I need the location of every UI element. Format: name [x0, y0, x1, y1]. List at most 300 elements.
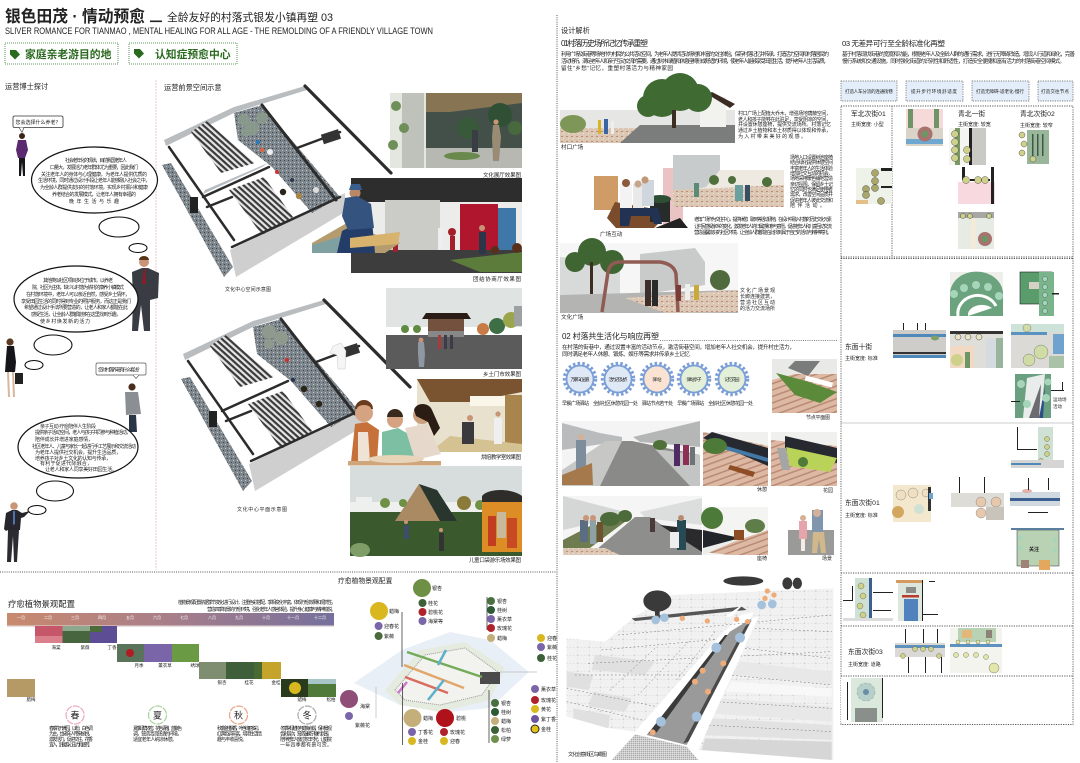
label: east secondary street 3: 东面次街03 [848, 647, 883, 656]
tag: type 3: 打造无障碍-适老化-慢行 [976, 88, 1024, 95]
leader lines [376, 597, 537, 745]
label: east secondary street 3: 主街宽度: 道路 [848, 661, 881, 668]
photo: street 1 [562, 421, 700, 486]
intro text 02 [562, 343, 795, 358]
text: autumn: 趣与丰收喜悦。 [217, 736, 247, 743]
photo: baking classroom [417, 379, 522, 452]
text: beside photo: 增加社交互动的机会， [790, 170, 833, 177]
caption: photo 3: 乡土门市效果图 [483, 370, 521, 378]
plan tile q: 关注 [1029, 546, 1039, 553]
text: beside photo [790, 154, 833, 209]
photo: elderly couple [788, 509, 834, 555]
plan tile d [958, 212, 994, 249]
plant photo captions: 金桂 [272, 679, 281, 686]
plant legend right lower [531, 685, 556, 733]
caption: interaction: 广场互动 [600, 230, 623, 238]
text: beside photo: 结合绿化提供休憩空间 [790, 159, 833, 166]
panel: plant seasonal calendar [7, 599, 336, 748]
text: spring: 激发活力，促进交往，花香 [49, 736, 93, 743]
plant legend right lower: 黄花 [541, 706, 551, 713]
plan tile v [841, 678, 891, 722]
text: spring: 为主，给老年人带来愉悦， [49, 730, 93, 738]
text: winter: 一年四季都有景可赏。 [280, 742, 332, 748]
speech bubble 2: 希望通过设计手法所要营造的，让老人和家人都能在此 [24, 304, 128, 311]
intro paragraph: 活动场所，满足老年人和亲子互动交流的需要，通过树木绿植和休息座椅形成舒适的环境，使老年人能够享受田园生活，提升老年人生活品质， [561, 57, 829, 65]
plant legend top left [370, 602, 399, 640]
thought bubble 1 [99, 217, 147, 252]
plan tile o [951, 477, 1004, 520]
photo: plaza with wall [673, 155, 784, 207]
gear: node 1 [564, 364, 596, 394]
label: street 1: 主街宽度: 小型 [851, 121, 884, 128]
text: winter: 色彩层次，营造温暖宁静的氛围， [280, 730, 332, 738]
speech bubble 1: 口量大，发展活力老年群体尤为重要，因此我们 [50, 164, 138, 171]
gear: node 3: 驿站 [652, 376, 662, 383]
label: street 2: 青北一街 [958, 109, 985, 118]
plant legend bottom middle: 蜡梅 [501, 718, 511, 725]
label: east secondary street 3 [848, 647, 883, 668]
text: plaza: 为入村带来美好的观感。 [738, 133, 806, 140]
speech bubble 3: 有利于促进代际融合， [40, 460, 92, 467]
caption: photo 5: 儿童口袋游乐场效果图 [469, 556, 521, 564]
plan tile q [1011, 528, 1064, 572]
plant legend bottom centre [404, 709, 466, 745]
plant legend top left: 迎春花 [384, 623, 399, 630]
plant photo captions: 桂花 [244, 679, 254, 686]
plant legend right lower: 金桂 [541, 726, 551, 733]
board material [594, 176, 618, 210]
icon: spring: 春 [70, 710, 80, 720]
gear: node 4 [678, 364, 710, 394]
speech bubble 3: 亲子互动·疗愈陪伴人生阶段 [40, 423, 96, 430]
label: street 2 [958, 109, 991, 128]
text: cultural plaza: 文化广场景观 [740, 287, 775, 294]
plant photos row 1 [35, 626, 117, 643]
heading: section 03: 03 无差异可行至全龄标准化再塑 [842, 38, 945, 48]
photo: interior craft hall [351, 178, 522, 273]
label: street 1 [851, 109, 886, 128]
plant photos row 3 [199, 662, 281, 679]
text: plaza: 并设置休憩座椅，提供交流场所。村落记忆 [738, 121, 831, 128]
text: beside photo: 场地入口设置树池座椅 [790, 154, 833, 161]
plan tile k [1011, 324, 1064, 368]
plan tile i [893, 323, 946, 366]
plan tile b [949, 128, 986, 165]
intro paragraph: 留住“乡愁”记忆，重塑村落活力与精神家园 [561, 64, 673, 72]
text: beside photo: 忆的同时也满足使用者 [790, 186, 833, 193]
tag: type 1 [841, 81, 897, 101]
label: east street: 东面十街 [845, 342, 872, 351]
icon: winter: 冬 [302, 710, 312, 720]
caption: photo 4: 烘焙教学室效果图 [481, 453, 521, 461]
photo: cultural plaza with arch [560, 238, 738, 313]
plant legend top left: 紫薇 [384, 633, 394, 640]
plant legend right top [487, 597, 512, 642]
plant photo january [7, 679, 35, 697]
speech bubble 2: 使乡村焕发新的活力 [40, 318, 90, 325]
intro text: 植物景观配置依据季节变化进行设计，注重色彩搭配，季相变化丰富，体现疗愈效果和观赏性， [178, 599, 336, 606]
month timeline bar: 六月 [153, 614, 161, 620]
text: autumn: 秋季金桂飘香，叶色绚丽多彩， [217, 725, 262, 732]
photo: rest area [703, 432, 768, 486]
callout: question 1 [13, 116, 63, 132]
text: below photo: 让村民感受家乡的变化，激发老年人的归属感和参与意愿，促进老年人和儿童互动交流 [694, 223, 832, 230]
speech bubble 3: 陪伴成长并增进家庭感情， [35, 436, 93, 443]
text: beside photo: 陪伴活动。 [790, 202, 825, 209]
speech bubble 1: 晚年生活与乐趣 [69, 198, 119, 205]
plant photos row 4 [281, 679, 336, 697]
month timeline bar: 一月 [17, 615, 25, 620]
intro text 03: 慢行系统和交通设施，同时强化街道的识别性和舒适性，打造安全便捷和富有活力的村落街巷空间模式。 [842, 57, 1065, 65]
text: below photo [694, 216, 832, 236]
person: man bottom [4, 502, 30, 562]
text: spring: 宜人，舒缓身心压力和疲劳。 [49, 742, 93, 748]
text: summer: 夏季绿荫浓密，花色清雅，蓝紫色 [133, 725, 182, 732]
gear: node 5: 记忆花园 [724, 376, 740, 383]
month timeline bar: 十二月 [314, 614, 326, 620]
text: beside photo: 促进老年人彼此交流和 [790, 197, 833, 204]
intro paragraph [561, 50, 829, 72]
plant photo captions: 松柏 [326, 696, 336, 703]
label: street 2: 主街宽度: 较宽 [958, 121, 991, 128]
callout: question 2: 您对村落养老有什么看法？ [98, 366, 142, 374]
text: beside photo: 亲切氛围，保留乡土记 [790, 181, 833, 188]
plant legend bottom middle [491, 699, 511, 743]
label: street 3: 青北次街02 [1020, 109, 1055, 118]
text: plaza: 村口广场上配植大乔木，增强场地荫蔽空间， [738, 110, 831, 117]
plant legend bottom centre: 丁香花 [418, 729, 433, 736]
speech bubble 2: 享受田园生活的同时得到专业的照护服务，而这正是我们 [21, 298, 131, 305]
plant photo captions: 绣球 [190, 662, 200, 669]
plan tile u [950, 628, 1002, 673]
text: cultural plaza: 营造社区互动 [740, 299, 775, 306]
month timeline bar: 九月 [235, 614, 243, 620]
text: plaza: 通过乡土植物和本土材质得以体现和传承， [738, 127, 831, 134]
plan tile h [1015, 272, 1059, 316]
gear: node 4: 驿站亭子 [686, 376, 702, 383]
plan tile f [856, 168, 892, 204]
plan tile r [843, 578, 893, 621]
plant legend right top: 桂树 [497, 607, 507, 614]
text: summer: 调，营造清凉舒适的环境， [133, 730, 182, 738]
thought bubble 3 [28, 481, 74, 514]
overlay: craftsman with log [312, 184, 400, 253]
photo: bench corner [701, 507, 768, 555]
callout: question 2 [96, 363, 146, 378]
plant legend left lower [340, 690, 370, 729]
plant legend bottom centre: 蜡梅 [423, 715, 433, 722]
speech bubble 3: 让老人和家人同享美好田园生活。 [45, 466, 117, 473]
tag: dementia healing center [129, 43, 237, 64]
label: east street: 主街宽度: 标准 [845, 355, 878, 362]
text: beside photo: 场地采用暖色铺地营造 [790, 175, 833, 182]
plant legend left lower: 紫薇花 [355, 722, 370, 729]
plant legend top: 银杏 [432, 585, 442, 592]
speech bubble 3: 提供亲子活动空间，老人与孩子共同参与种植活动， [35, 429, 131, 436]
plant photo captions [26, 644, 336, 703]
speech bubble 1: 为全龄人群提供友好的村落环境，实现乡村振兴和健康 [40, 184, 148, 191]
text: cultural plaza [740, 287, 775, 312]
gear: node 5 [716, 364, 748, 394]
text: plaza [738, 110, 831, 140]
month timeline bar: 十月 [262, 614, 270, 620]
plant legend bottom centre: 迎春 [450, 738, 460, 745]
photo: garden [771, 432, 837, 486]
text: autumn: 红黄色调丰富，增添生活情 [217, 730, 262, 738]
text: summer [133, 725, 182, 743]
title: 银色田茂 · 情动预愈 [5, 6, 145, 26]
floor plan 1 [162, 86, 391, 278]
plant legend right top: 薰衣草 [497, 616, 512, 623]
caption: plaza: 村口广场 [561, 143, 584, 151]
panel: design analysis 01 [560, 26, 833, 321]
plan tile p [1010, 478, 1060, 519]
plant photo captions: 银杏 [218, 679, 227, 686]
panel: operations dialogue [4, 82, 159, 562]
intro text 03 [842, 50, 1075, 65]
person: woman in purple [16, 133, 28, 176]
heading: site map: 疗愈植物景观配置 [338, 576, 393, 585]
plant legend bottom middle: 松柏 [501, 727, 511, 734]
person: woman in black [5, 338, 23, 397]
plant legend far right: 桂花 [547, 655, 557, 662]
text: below photo: 老年广场作为交往中心，提供休憩、聊天等活动场地，在设计中融入村落的历史文化元素 [694, 216, 832, 223]
text: cultural plaza: 长廊连接建筑， [740, 293, 775, 300]
text: cultural plaza: 的活力交流场所 [740, 305, 775, 312]
month timeline bar: 十一月 [287, 614, 299, 620]
plant photo captions: 丁香 [108, 644, 117, 651]
gear: node 3 [642, 364, 672, 394]
plant legend bottom middle: 银杏 [501, 700, 511, 707]
plant legend right top: 银杏 [497, 598, 507, 605]
plant photo captions: 紫薇 [80, 644, 90, 651]
intro text 02: 同时满足老年人休憩、锻炼、娱乐等需求并传承乡土记忆 [562, 350, 690, 358]
callout: question 1: 您会选择什么养老？ [15, 119, 61, 126]
plant legend right lower: 薰衣草 [541, 686, 556, 693]
speech bubble 1: 养老结合的发展模式，让老年人拥有幸福的 [52, 191, 136, 198]
gear caption: 早餐广场驿站 全龄社区休憩花园一处 驿站节点若干处 早餐广场驿站 全龄社区休憩花园一处 [562, 400, 753, 407]
panel: section 03 streets [841, 38, 1075, 724]
text: below photo: 营造温馨友好的社区环境，让全龄人群都能在此找到属于自己的活动与精神寄托。 [694, 229, 832, 236]
label: east secondary street 1 [845, 498, 880, 519]
divider vertical middle [556, 15, 558, 763]
speech bubble 3: 社区老年人、儿童与家长一起进行手工艺展示和交流活动 [32, 443, 136, 450]
plan tile t [895, 629, 945, 673]
text: beside photo: 丰富老年人的生活体验 [790, 165, 833, 172]
caption: aerial view: 文化创意街区鸟瞰图 [568, 750, 607, 758]
plan tile j [950, 324, 1003, 368]
plant photo captions: 月季 [134, 662, 144, 669]
text: beside photo: 需求，改善空间品质并 [790, 191, 833, 198]
plant legend bottom middle: 绿萝 [501, 736, 511, 743]
heading: operations: 运营博士探讨 [5, 82, 48, 91]
gear: node 2: 活力记忆站点 [608, 376, 628, 383]
label: east secondary street 1: 主街宽度: 标准 [845, 512, 878, 519]
plant photo captions: 薰衣草 [158, 662, 172, 669]
plant photo captions: 蜡梅 [298, 696, 307, 703]
speech bubble 2 [14, 266, 138, 332]
plant legend top: 碧桃花 [428, 609, 443, 616]
tag: type 3 [972, 81, 1029, 101]
floor plan 2 [181, 300, 410, 492]
plan tile g [950, 272, 1003, 316]
plan tile l: 活动 [1053, 403, 1062, 410]
speech bubble 3 [18, 416, 138, 478]
speech bubble 1: 生活环境，同时通过设计手段让老年人能够融入社会之中， [38, 177, 150, 184]
intro paragraph: 利用广场及街巷等场地作为村民的公共活动空间，为老年人提供活动场地和丰富的交往体验，保存村落记忆并传承，打造活力空间和村落居民的 [561, 50, 829, 58]
plant legend far right: 迎春 [547, 635, 557, 642]
heading: plant calendar: 疗愈植物景观配置 [8, 599, 75, 609]
photo: culture hall courtyard [388, 93, 522, 168]
divider horizontal left [0, 571, 557, 573]
plan tile l: 运动场 [1053, 396, 1067, 403]
plant legend far right [537, 634, 557, 662]
plant legend bottom centre: 金桂 [418, 738, 428, 745]
tag: type 2: 提升步行环境舒适度 [911, 88, 957, 95]
label: east secondary street 1: 东面次街01 [845, 498, 880, 507]
speech bubble 2: 院、社区为主体，缺少以村落为依托的康养小镇模式 [32, 284, 124, 291]
plant legend bottom centre: 玫瑰花 [450, 729, 465, 736]
caption: corner: 座椅 [757, 555, 767, 562]
caption: photo 2: 团结协商厅效果图 [473, 275, 521, 283]
tag: family elderly care destination: 家庭亲老游目的地 [25, 47, 112, 61]
text: winter [280, 725, 332, 748]
icon: spring [66, 706, 84, 724]
caption: plan 1: 文化中心空间示意图 [225, 286, 271, 293]
photo: garden overview [772, 359, 837, 413]
text: plaza: 老人和孩子能够在此驻足，享受阴凉的空间， [738, 116, 831, 123]
tag: type 1: 打造人车分流的连通街巷 [845, 88, 893, 95]
photo: street 2 [563, 496, 702, 555]
subtitle: 全龄友好的村落式银发小镇再塑 03 [167, 10, 333, 24]
caption: cultural plaza: 文化广场 [561, 313, 584, 321]
text: spring: 春季花开满园，以粉、白色调 [49, 725, 93, 732]
icon: autumn: 秋 [234, 710, 243, 720]
plant legend right lower: 玫瑰花 [541, 697, 556, 704]
plant legend far right: 紫薇 [547, 644, 557, 651]
plan tile m [1011, 427, 1064, 471]
table frame [841, 106, 1073, 724]
divider section 02 [660, 340, 838, 342]
tag: dementia healing center: 认知症预愈中心 [155, 47, 231, 61]
left divider [155, 80, 157, 570]
panel: design analysis 02 [562, 331, 838, 562]
speech bubble 2: 在村落环境中，老年人可以亲近自然，感受乡土情怀， [26, 291, 130, 298]
tag: family elderly care destination [5, 43, 118, 64]
plant legend top [413, 579, 443, 625]
caption: garden overview: 节点平面图 [806, 415, 830, 421]
label: street 3: 主街宽度: 较窄 [1020, 122, 1053, 129]
plant legend right lower: 紫丁香 [541, 716, 556, 723]
speech bubble 1: 关注老年人的身体与心理健康，为老年人提供优质的 [41, 171, 147, 178]
month timeline bar [7, 613, 334, 627]
speech bubble 1: 社会老年化的现状，目前我国老年人 [65, 157, 127, 164]
plant legend top: 海棠等 [428, 618, 443, 625]
plan tile n [892, 485, 945, 522]
month timeline bar: 二月 [44, 615, 52, 620]
plant photo captions: 海棠 [52, 644, 61, 651]
caption: rest: 休憩 [757, 486, 767, 493]
month timeline bar: 八月 [208, 615, 216, 620]
intro text 03: 基于村落现状街巷的宽度和功能，根据老年人及全龄人群的通行需求，进行无障碍改造，增设人行道和绿化，完善 [842, 50, 1075, 58]
text: winter: 陪伴老年人度过冬日时光，让庭院 [280, 736, 332, 743]
panel: plant site map [338, 576, 557, 745]
speech bubble 1 [32, 147, 158, 213]
speech bubble 3: 为老年人提供社交机会，提升生活品质， [35, 449, 121, 456]
month timeline bar: 四月 [98, 615, 106, 620]
text: summer: 适宜老年人纳凉休憩。 [133, 736, 177, 743]
plant legend bottom middle: 桂树 [501, 709, 511, 716]
plant legend right top: 玫瑰花 [497, 625, 512, 632]
plan tile l [1011, 374, 1067, 418]
text: winter: 冬季常绿植物与蜡梅点缀，保持景观 [280, 725, 332, 732]
english subtitle: SLIVER ROMANCE FOR TIANMAO , MENTAL HEALING FOR ALL AGE - THE REMOLDING OF A FRIENDLY VILLAGE TOWN [5, 26, 433, 36]
tag: type 2 [906, 81, 963, 101]
label: street 1: 军北次街01 [851, 109, 886, 118]
heading: design analysis: 设计解析 [561, 26, 590, 35]
speech bubble 2: 感受生活，让全龄人群都能够在这里找到乐趣， [31, 311, 121, 318]
intro text: 营造四季有景的疗愈环境，强化老年人感官体验，提升身心健康与精神愉悦。 [207, 606, 336, 613]
plan tile e [1014, 130, 1049, 164]
intro text 02: 在村落的街巷中，通过设置丰富的活动节点，激活街巷空间，增加老年人社交机会，提升村庄活力， [562, 343, 795, 351]
month timeline bar: 七月 [180, 614, 188, 620]
speech bubble 3: 培养孩子对乡土文化的认知与传承， [35, 455, 111, 462]
caption: garden: 花园 [823, 487, 833, 494]
tag: type 4 [1038, 81, 1073, 101]
aerial massing view [567, 576, 833, 760]
plant legend top left: 蜡梅 [389, 608, 399, 615]
caption: photo 1: 文化展厅效果图 [483, 171, 521, 179]
text: autumn [217, 725, 262, 743]
icon: autumn [230, 706, 248, 724]
speech bubble 2: 其他类似社区项目多位于城市，以养老 [43, 277, 113, 284]
plant legend bottom centre: 碧桃 [456, 715, 466, 722]
plant legend top: 桂花 [428, 600, 438, 607]
plant photos row 2 [117, 644, 199, 662]
month timeline bar: 五月 [126, 615, 134, 620]
icon: summer [148, 706, 166, 724]
heading: section 01: 01村落历史场所记忆传承重塑 [561, 38, 648, 48]
icon: winter [298, 706, 316, 724]
site map isometric [354, 632, 529, 712]
icon: summer: 夏 [153, 710, 162, 720]
overlay: family baking [348, 400, 441, 466]
thought bubble 2 [25, 335, 72, 370]
plan tile s [896, 578, 943, 621]
plant legend right top: 蜡梅 [497, 635, 507, 642]
tag: type 4: 打造交往节点 [1041, 88, 1069, 95]
caption: plan 2: 文化中心平面示意图 [237, 506, 287, 513]
label: street 3 [1020, 109, 1055, 129]
plant photo captions: 腊梅 [26, 696, 36, 703]
photo: seated elders on bench [607, 176, 688, 228]
person: woman in grey [125, 383, 141, 432]
photo: village entrance plaza [560, 73, 735, 143]
plan tile a [906, 109, 943, 146]
plan tile c [958, 167, 995, 204]
plant legend left lower: 海棠 [360, 703, 370, 710]
photo: vernacular shop [386, 288, 522, 369]
intro text [178, 599, 336, 613]
person: man in suit [132, 256, 159, 331]
label: east street [845, 342, 878, 362]
heading: section 02: 02 村落共生活化与响应再塑 [562, 331, 659, 341]
text: spring [49, 725, 93, 748]
caption: couple: 场景 [822, 555, 832, 562]
pink block [663, 168, 683, 227]
gear: node 1: 万家归心园道 [570, 376, 590, 383]
month timeline bar: 三月 [71, 615, 79, 620]
